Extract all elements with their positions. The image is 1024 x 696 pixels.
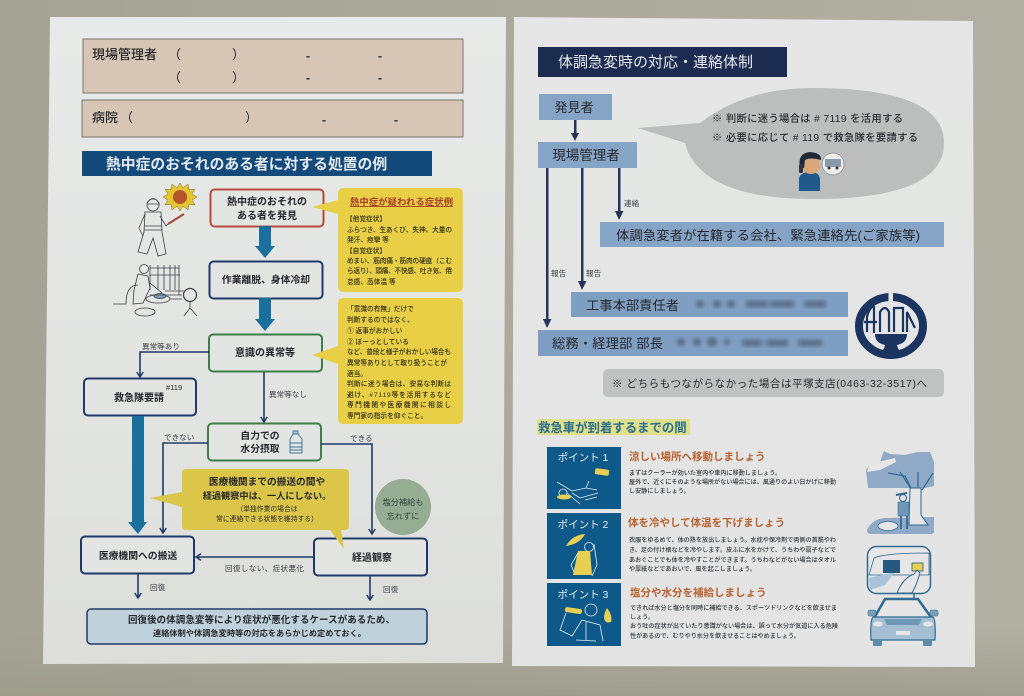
branch: no abnormality: 異常等なし	[269, 389, 307, 399]
box: finder	[539, 94, 612, 120]
illustration: hazard button inside car	[868, 546, 930, 594]
flow box: discover suspected person: ある者を発見	[237, 209, 297, 222]
panel: right sheet	[512, 17, 975, 667]
body heading: replenish salt and water: できれば水分と塩分を同時に補給できる、スポーツドリンクなどを飲ませま	[630, 604, 837, 612]
branch: not recovering: 回復しない、症状悪化	[225, 563, 304, 573]
callout: suspected symptoms: 【自覚症状】	[346, 246, 386, 255]
hospital contact box: （	[120, 110, 133, 125]
body heading: cool the body: き、足の付け根などを冷やします。皮ふに水をかけて、うちわや扇子などで	[629, 546, 836, 554]
body heading: cool the body: 体を冷やして体温を下げましょう	[628, 516, 785, 529]
arrow: report to general affairs: 報告	[551, 268, 567, 278]
summary box	[87, 609, 427, 644]
callout: suspected symptoms: ら返り）、頭痛、不快感、吐き気、倦	[347, 266, 452, 275]
arrow: finder to site manager	[571, 120, 579, 141]
site manager contact box: -	[306, 49, 310, 63]
callout: consciousness judgement: 「意識の有無」だけで	[347, 304, 414, 313]
arrow: report to construction head	[578, 168, 602, 290]
redacted contact details	[696, 300, 826, 308]
flow box: self hydration	[208, 424, 321, 460]
callout: do not leave alone: 経過観察中は、一人にしない。	[203, 490, 331, 501]
panel: point 1	[547, 447, 836, 509]
site manager contact box: （	[168, 47, 181, 62]
body heading: replenish salt and water: おう吐の症状が出ていたり意識がない場合は、誤って水分が気道に入る危険	[630, 622, 838, 630]
flow box: self hydration: 自力での	[240, 429, 280, 442]
body heading: replenish salt and water: しょう。	[630, 614, 654, 621]
branch: can drink: できる	[350, 434, 373, 443]
site manager contact box: -	[378, 71, 382, 85]
body heading: cool the body	[628, 516, 836, 573]
site manager contact box	[83, 39, 463, 93]
panel: point 3	[547, 583, 838, 646]
heading: until the ambulance arrives: 救急車が到着するまでの間	[538, 420, 687, 435]
summary box: 連絡体制や体調急変時等の対応をあらかじめ定めておく。	[153, 628, 366, 638]
callout: suspected symptoms	[312, 188, 463, 292]
heading: heatstroke treatment example: 熱中症のおそれのある者に対する処置の例	[106, 155, 387, 173]
body heading: move to a cool place: 涼しい場所へ移動しましょう	[629, 450, 766, 463]
flow box: monitor: 経過観察	[352, 551, 392, 564]
note: Hiratsuka branch fallback: ※ どちらもつながらなかった場合は平塚支店(0463-32-3517)へ	[612, 377, 927, 390]
heading: heatstroke treatment example	[82, 151, 432, 176]
arrow: contact to company and family: 連絡	[624, 198, 640, 208]
hospital contact box: -	[394, 113, 398, 127]
hospital contact box	[82, 100, 463, 137]
panel: point 2: ポイント 2	[558, 519, 609, 531]
flow box: transport to hospital: 医療機関への搬送	[99, 549, 177, 562]
big arrow: ambulance to hospital	[128, 416, 147, 534]
flow box: transport to hospital	[81, 536, 194, 574]
arrow: recovery right: 回復	[383, 584, 399, 594]
logo: company emblem	[859, 291, 923, 355]
box: construction head: 工事本部責任者	[586, 298, 679, 313]
icon: water bottle	[290, 431, 302, 453]
note: salt replenishment: 忘れずに	[387, 511, 419, 521]
body heading: cool the body: あおぐことでも体を冷やすことができます。うちわなどがない場合はタオル	[629, 556, 836, 564]
body heading: move to a cool place: まずはクーラーが効いた室内や車内に移動しましょう。	[629, 469, 781, 477]
body heading: move to a cool place	[629, 450, 836, 495]
flow box: self hydration: 水分摂取	[240, 442, 280, 455]
panel: point 1: ポイント 1	[558, 452, 609, 464]
box: site manager	[538, 142, 637, 168]
callout: consciousness judgement: 判断するのではなく、	[347, 315, 414, 324]
callout: suspected symptoms: 【他覚症状】	[346, 214, 386, 223]
callout: consciousness judgement: 判断に迷う場合は、安易な判断は	[347, 379, 451, 388]
branch: cannot drink: できない	[164, 433, 194, 442]
site manager contact box: （	[168, 70, 181, 85]
body heading: replenish salt and water: 塩分や水分を補給しましょう	[630, 586, 766, 599]
panel: point 2	[547, 513, 836, 579]
body heading: move to a cool place: し安静にしましょう。	[629, 487, 690, 495]
box: company and emergency contacts	[600, 222, 944, 247]
panel: left sheet	[43, 17, 506, 664]
site manager contact box: ）	[232, 70, 245, 85]
site manager contact box: -	[306, 71, 310, 85]
callout: consciousness judgement: など、普段と様子がおかしい場合も	[347, 347, 451, 356]
box: construction head	[571, 292, 848, 317]
callout: consciousness judgement: ① 返事がおかしい	[347, 326, 403, 335]
hospital contact box: ）	[245, 110, 258, 125]
callout: do not leave alone	[150, 469, 349, 549]
branch: not recovering	[196, 557, 314, 573]
callout: suspected symptoms: ふらつき、生あくび、失神、大量の	[347, 225, 452, 234]
body heading: replenish salt and water	[630, 586, 838, 640]
box: general affairs manager: 総務・経理部 部長	[552, 336, 663, 351]
callout: suspected symptoms: 怠感、高体温 等	[347, 277, 396, 286]
flow box: remove from work and cool: 作業離脱、身体冷却	[222, 273, 310, 286]
flow box: abnormal consciousness	[209, 334, 322, 372]
body heading: cool the body: や厚紙などであおいで、風を起こしましょう。	[629, 565, 756, 573]
speech bubble: #7119 and #119 guidance: ※ 判断に迷う場合は # 7119 を活用する	[712, 112, 903, 125]
speech bubble: #7119 and #119 guidance	[638, 88, 944, 199]
note: salt replenishment: 塩分補給も	[383, 497, 423, 507]
box: general affairs manager	[538, 330, 848, 356]
heading: emergency response system	[538, 47, 787, 77]
arrow: recovery left	[138, 574, 166, 598]
callout: suspected symptoms: めまい、筋肉痛・筋肉の硬直（こむ	[347, 256, 452, 265]
callout: do not leave alone: 常に連絡できる状態を維持する）	[216, 514, 318, 523]
hospital contact box: -	[322, 113, 326, 127]
icon: cooling a worker with hose and fan	[113, 264, 197, 316]
flow box: call ambulance	[84, 378, 196, 416]
illustration: car with hazard lights	[868, 593, 938, 646]
body heading: replenish salt and water: 性があるので、むりやり水分を飲ませることはやめましょう。	[630, 632, 800, 640]
callout: consciousness judgement: 避け、#7119等を活用するなど	[347, 390, 451, 399]
panel: point 3: ポイント 3	[558, 589, 609, 601]
flow box: discover suspected person: 熱中症のおそれの	[227, 195, 307, 208]
note: Hiratsuka branch fallback	[603, 369, 944, 397]
arrow: to cooling	[255, 226, 275, 258]
callout: consciousness judgement: 適当。	[347, 369, 367, 378]
callout: consciousness judgement	[312, 298, 463, 424]
hospital contact box: 病院	[92, 110, 118, 125]
callout: do not leave alone: 医療機関までの搬送の間や	[209, 475, 325, 488]
callout: consciousness judgement: 専門機関や医療機関に相談し	[347, 400, 451, 409]
branch: can drink	[321, 434, 373, 534]
illustration: resting under a tree	[866, 451, 934, 534]
callout: consciousness judgement: 専門家の指示を仰ぐこと。	[347, 411, 427, 420]
flow box: call ambulance: 救急隊要請	[114, 391, 164, 404]
callout: consciousness judgement: ② ぼーっとしている	[347, 337, 409, 346]
site manager contact box: ）	[232, 47, 245, 62]
speech bubble: #7119 and #119 guidance: ※ 必要に応じて # 119 で救急隊を要請する	[712, 131, 918, 144]
flow box: remove from work and cool	[210, 262, 322, 298]
callout: suspected symptoms: 熱中症が疑われる症状例	[350, 196, 453, 207]
icon: person calling ambulance	[799, 152, 844, 191]
branch: no abnormality	[264, 372, 307, 422]
branch: abnormal yes: 異常等あり	[142, 341, 180, 351]
arrow: to consciousness check	[255, 298, 275, 331]
icon: person cooling with a hat	[566, 534, 597, 576]
arrow: report to general affairs	[543, 168, 567, 328]
arrow: recovery right	[370, 576, 399, 600]
branch: abnormal yes	[140, 341, 209, 377]
branch: cannot drink	[163, 433, 208, 533]
icon: person drinking	[560, 604, 612, 641]
callout: suspected symptoms: 発汗、痙攣 等	[347, 235, 389, 244]
heading: emergency response system: 体調急変時の対応・連絡体制	[558, 54, 753, 71]
callout: do not leave alone: （単独作業の場合は	[236, 504, 298, 513]
summary box: 回復後の体調急変等により症状が悪化するケースがあるため、	[128, 614, 395, 626]
icon: person lying down	[557, 468, 609, 504]
callout: consciousness judgement: 異常等ありとして取り扱うことが	[347, 358, 447, 367]
site manager contact box: -	[378, 49, 382, 63]
note: salt replenishment	[375, 479, 431, 535]
arrow: report to construction head: 報告	[586, 268, 602, 278]
box: finder: 発見者	[554, 100, 594, 115]
box: site manager: 現場管理者	[552, 148, 620, 163]
arrow: recovery left: 回復	[150, 582, 166, 592]
site manager contact box: 現場管理者	[92, 47, 157, 62]
flow box: abnormal consciousness: 意識の異常等	[235, 346, 295, 359]
icon: worker feeling unwell	[138, 198, 184, 256]
arrow: contact to company and family	[615, 168, 640, 220]
icon: sun	[163, 183, 197, 211]
redacted contact details	[677, 337, 822, 347]
flow box: call ambulance: #119	[166, 383, 182, 392]
box: company and emergency contacts: 体調急変者が在籍する会社、緊急連絡先(ご家族等)	[616, 227, 920, 243]
flow box: discover suspected person	[210, 190, 324, 226]
flow box: monitor	[314, 538, 427, 576]
body heading: cool the body: 衣服をゆるめて、体の熱を放出しましょう。水枕や保冷剤で両側の首筋やわ	[629, 536, 836, 544]
body heading: move to a cool place: 屋外で、近くにそのような場所がない場合には、風通りのよい日かげに移動	[629, 478, 836, 486]
